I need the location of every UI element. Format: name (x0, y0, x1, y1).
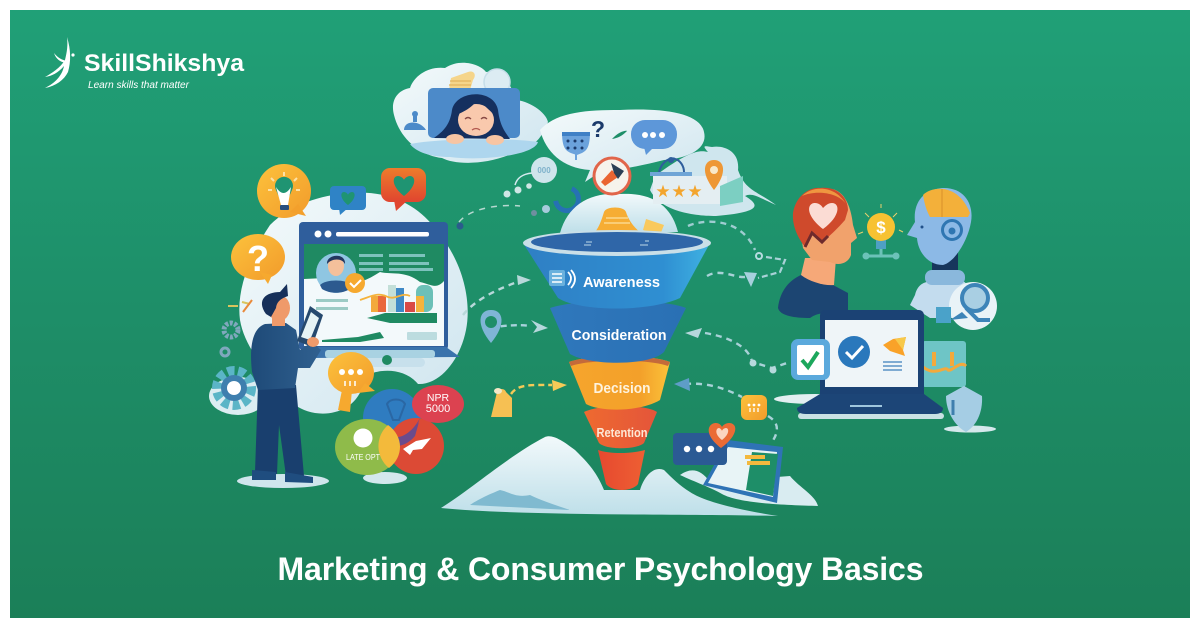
chat tile (673, 433, 727, 465)
title: Marketing & Consumer Psychology Basics (278, 551, 924, 587)
checkmark circle (838, 336, 870, 368)
map pin (705, 160, 723, 190)
clipboard check (791, 339, 830, 380)
tablet (297, 306, 323, 347)
dashed arrow: pin to consideration (491, 320, 548, 333)
logo shapes (883, 337, 906, 356)
teal chart card (922, 341, 966, 387)
ground shadow (237, 474, 329, 488)
orange chat tile (741, 395, 767, 420)
venn late label (354, 428, 372, 448)
dashed arrow: left to awareness (463, 275, 531, 315)
laptop screen (820, 310, 924, 402)
stacked papers (449, 72, 475, 90)
logo mark (45, 37, 75, 88)
stars (655, 182, 703, 201)
venn diagram: NPR (427, 392, 450, 404)
funnel stage: awareness (523, 243, 710, 308)
review cloud (650, 146, 776, 216)
small gears (221, 300, 252, 356)
basket body (650, 172, 692, 176)
idea bulb bubble (257, 164, 311, 218)
consideration label: Consideration (572, 327, 666, 344)
browser window (299, 222, 460, 367)
bar chart (360, 285, 433, 312)
map pin icon (480, 310, 502, 343)
gear small blob (209, 377, 267, 415)
keypad icon (562, 132, 590, 160)
blue heart bubble (330, 186, 366, 215)
dollar bulb: $ (876, 218, 886, 237)
human brain hair (793, 188, 848, 247)
thought cloud: person in bed (393, 63, 548, 163)
awareness label: Awareness (583, 275, 660, 291)
keyboard (797, 394, 943, 414)
stars: ★ (655, 182, 671, 201)
bell on funnel (590, 208, 644, 236)
funnel stage: consideration (550, 300, 686, 363)
funnel stage: retention tip (598, 450, 645, 490)
green envelope (720, 176, 743, 206)
venn diagram: 5000 (426, 403, 450, 415)
hair (262, 284, 288, 317)
leaf (612, 131, 627, 139)
question bubble (231, 234, 285, 284)
magnifier (949, 282, 997, 330)
decision label: Decision (594, 380, 650, 397)
head (268, 295, 290, 321)
venn diagram (335, 385, 464, 484)
stars: ★ (671, 182, 687, 201)
donut progress ring (554, 185, 582, 214)
hands (446, 134, 464, 144)
venn price circle (412, 385, 464, 423)
snowy mountain (441, 436, 778, 516)
shopping bag icon (491, 388, 512, 417)
awareness icon (549, 270, 575, 288)
basket with star reviews (650, 146, 776, 216)
profile avatar (316, 253, 356, 293)
venn red circle (388, 418, 444, 474)
marketer figure (237, 284, 329, 488)
legs (255, 385, 304, 476)
hair (434, 94, 510, 139)
logo tagline: Learn skills that matter (88, 80, 190, 91)
question bubble: ? (247, 238, 269, 279)
logo (45, 37, 245, 91)
dashed arrow: to decision from right (674, 378, 777, 442)
small dotted thought trail: 000 (537, 166, 551, 175)
small dotted thought trail (456, 157, 557, 230)
chat bubble (631, 120, 677, 155)
keyboard shadow (774, 394, 856, 404)
laptop base (310, 347, 460, 358)
funnel (523, 208, 711, 490)
dollar bulb (858, 204, 903, 260)
funnel rim (523, 230, 711, 256)
left illustration: marketer and web dashboard (209, 164, 468, 488)
light background blob (239, 193, 468, 414)
cloud shape (393, 63, 548, 163)
retention label: Retention (596, 426, 648, 440)
pillow (428, 88, 520, 138)
dashed arrow: to decision (511, 380, 567, 394)
basket handle (659, 158, 684, 172)
play circle (484, 69, 510, 95)
browser address bar (314, 230, 322, 238)
human face (798, 189, 857, 264)
venn diagram: LATE OPT (346, 453, 380, 462)
robot (907, 188, 997, 330)
thought cloud: reviews and questions (540, 110, 705, 182)
big gear (217, 371, 251, 405)
orange chat bubble (328, 352, 375, 412)
blanket (410, 139, 538, 158)
snow hill behind funnel (560, 194, 678, 233)
heart (809, 203, 837, 229)
logo wordmark: SkillShikshya (84, 50, 245, 77)
funnel stage: decision (569, 356, 670, 410)
venn blue circle (363, 389, 421, 447)
jacket (251, 323, 321, 390)
laptop with checklist (774, 310, 996, 432)
heart tile (709, 423, 735, 448)
question mark: ? (591, 116, 605, 142)
open book with chat (673, 423, 818, 506)
check badge (345, 273, 365, 293)
bedside lamp (404, 122, 426, 130)
cloud shape (540, 110, 705, 182)
dashed arrow: top right (688, 222, 785, 287)
funnel stage: retention (584, 406, 657, 448)
stars: ★ (687, 182, 703, 201)
orange heart bubble (381, 168, 426, 211)
face (458, 104, 494, 136)
book (703, 440, 783, 503)
megaphone badge (594, 158, 630, 194)
right illustration: human and robot heads (778, 188, 997, 330)
robot head (907, 188, 972, 265)
dashed arrow: to consideration from right (685, 328, 790, 374)
venn green circle (335, 419, 399, 475)
text lines (359, 254, 433, 271)
book snow (680, 470, 818, 506)
human bust (778, 188, 857, 318)
shield (944, 386, 996, 432)
